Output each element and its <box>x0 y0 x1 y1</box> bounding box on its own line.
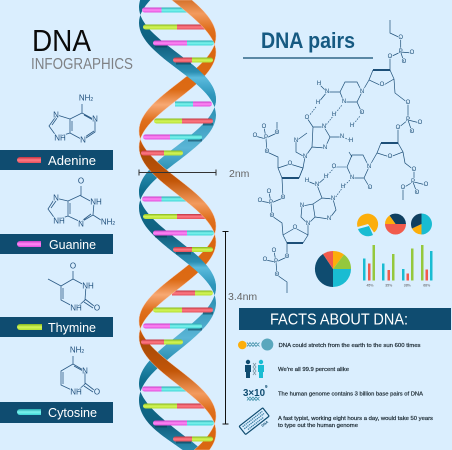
chart: DNA double helix <box>139 0 216 450</box>
diagram: base pair molecule: H <box>332 112 336 118</box>
diagram: base pair molecule: N <box>350 175 354 181</box>
icon: thymine structure: O <box>94 304 100 312</box>
fact 2: We're all 99.9 percent alike <box>278 367 349 373</box>
icon: sun to earth <box>238 338 273 350</box>
label: guanine <box>0 234 113 254</box>
subheading: infographics: INFOGRAPHICS <box>31 56 133 73</box>
diagram: base pair molecule: N <box>294 138 298 144</box>
dimension: 2nm width: 2nm <box>229 168 250 180</box>
fact 1: DNA could stretch from the earth to the sun 600 times <box>278 343 421 349</box>
diagram: base pair molecule: O <box>406 100 411 106</box>
icon: 3x10^9: 9 <box>265 384 268 389</box>
diagram: base pair molecule: O <box>267 189 272 195</box>
diagram: base pair molecule: P <box>411 179 415 185</box>
banner <box>239 308 451 330</box>
diagram: base pair molecule: O <box>410 129 415 135</box>
diagram: base pair molecule: O <box>285 254 290 260</box>
diagram: base pair molecule: O <box>263 257 268 263</box>
chart: bar groups: 45% <box>366 284 374 288</box>
diagram: base pair molecule: O <box>262 124 267 130</box>
base pairs in front <box>141 40 214 442</box>
diagram: base pair molecule: O <box>401 185 406 191</box>
diagram: base pair molecule: O <box>410 50 415 56</box>
diagram: base pair molecule: O <box>418 120 423 126</box>
chart: bar groups: 35% <box>385 284 393 288</box>
ribbon: blue strand over crossings <box>163 58 216 295</box>
chart: small pie 2 <box>385 214 406 234</box>
diagram: base pair molecule: N <box>322 124 326 130</box>
diagram: base pair molecule: N <box>367 164 371 170</box>
label: thymine <box>0 317 113 337</box>
diagram: base pair molecule: P <box>269 200 273 206</box>
ribbon: orange strand <box>139 0 216 450</box>
ribbon: blue strand <box>139 0 216 450</box>
diagram: base pair molecule: N <box>327 216 331 222</box>
dimension: 3.4nm pitch <box>222 232 257 424</box>
icon: guanine structure: N <box>78 220 84 228</box>
title <box>31 23 133 73</box>
diagram: base pair molecule: N <box>303 154 307 160</box>
label: adenine: Adenine <box>48 153 96 168</box>
icon: two people <box>245 360 264 378</box>
icon: cytosine structure: O <box>94 388 100 396</box>
icon: adenine structure: 2 <box>90 97 93 103</box>
chart: bar groups: 68% <box>423 284 431 288</box>
icon: 3x10^9 <box>243 384 268 400</box>
label: cytosine: Cytosine <box>48 405 97 420</box>
diagram: base pair molecule: P <box>406 117 410 123</box>
diagram: base pair molecule: O <box>360 110 365 116</box>
diagram: base pair molecule: N <box>360 89 364 95</box>
icon: keyboard <box>239 408 273 439</box>
banner: FACTS ABOUT DNA: <box>270 312 408 328</box>
diagram: base pair molecule: H <box>305 178 309 184</box>
icon: thymine structure: NH <box>70 304 82 312</box>
diagram: base pair molecule: O <box>253 133 258 139</box>
panel: nucleobases <box>0 94 115 423</box>
diagram: base pair molecule: N <box>340 134 344 140</box>
icon: guanine structure <box>48 176 115 228</box>
diagram: base pair molecule: O <box>265 149 270 155</box>
diagram: base pair molecule: H <box>341 184 345 190</box>
diagram: base pair molecule: O <box>258 198 263 204</box>
fact 4 <box>278 416 433 429</box>
label: thymine: Thymine <box>48 320 96 335</box>
diagram: base pair molecule: O <box>281 195 286 201</box>
diagram: base pair molecule: P <box>264 135 268 141</box>
diagram: base pair molecule: H <box>317 81 321 87</box>
icon: cytosine structure: NH <box>70 346 81 354</box>
diagram: base pair molecule: O <box>402 59 407 65</box>
diagram: base pair molecule: H <box>324 174 328 180</box>
diagram: base pair molecule: N <box>315 182 319 188</box>
icon: cytosine structure: 2 <box>81 349 84 355</box>
icon: thymine structure: NH <box>82 282 94 290</box>
diagram: base pair molecule: O <box>305 115 310 121</box>
diagram: base pair molecule: N <box>342 99 346 105</box>
icon: cytosine structure: N <box>82 366 88 376</box>
diagram: base pair molecule: H <box>350 123 354 129</box>
diagram: base pair molecule: O <box>396 125 401 131</box>
fact 4: A fast typist, working eight hours a day, would take 50 years <box>278 416 433 422</box>
diagram: base pair molecule: O <box>380 82 385 88</box>
chart: large pie <box>315 251 351 287</box>
chart: bar groups: 38% <box>404 284 412 288</box>
dimension: 2nm width <box>139 168 250 180</box>
icon: adenine structure: N <box>80 136 86 144</box>
diagram: base pair molecule: O <box>332 164 337 170</box>
diagram: base pair molecule: O <box>415 190 420 196</box>
icon: guanine structure: 2 <box>112 221 115 227</box>
diagram: base pair molecule: O <box>270 213 275 219</box>
diagram: base pair molecule: H <box>316 100 320 106</box>
diagram: base pair molecule: O <box>412 167 417 173</box>
chart: bar groups <box>363 245 432 288</box>
dimension: 3.4nm pitch: 3.4nm <box>228 291 257 303</box>
icon: thymine structure <box>48 262 100 312</box>
bar shadows <box>155 45 213 444</box>
label: guanine: Guanine <box>49 237 96 252</box>
label: cytosine <box>0 402 113 423</box>
diagram: base pair molecule: O <box>293 225 298 231</box>
icon: adenine structure <box>49 94 98 144</box>
icon: keyboard: DNA <box>261 420 269 428</box>
diagram: base pair molecule: N <box>325 89 329 95</box>
diagram: base pair molecule: O <box>288 161 293 167</box>
diagram: base pair molecule: O <box>275 130 280 136</box>
diagram: base pair molecule: O <box>388 154 393 160</box>
icon: thymine structure: O <box>70 262 76 270</box>
diagram: base pair molecule: N <box>323 145 327 151</box>
chart: small pie 3 <box>411 213 432 235</box>
chart: small pie 1 <box>357 214 378 236</box>
fact 4: to type out the human genome <box>278 423 358 429</box>
icon: guanine structure: NH <box>101 218 112 226</box>
diagram: base pair molecule: N <box>300 203 304 209</box>
heading: DNA pairs: DNA pairs <box>261 28 355 53</box>
panel: facts about DNA <box>238 308 451 439</box>
diagram: base pair molecule: O <box>398 35 403 41</box>
icon: guanine structure: O <box>78 176 84 186</box>
diagram: base pair molecule: N <box>331 196 335 202</box>
diagram: base pair molecule: O <box>424 182 429 188</box>
fact 3: The human genome contains 3 billion base pairs of DNA <box>278 392 423 398</box>
icon: cytosine structure <box>61 346 100 396</box>
diagram: base pair molecule: P <box>399 49 403 55</box>
icon: guanine structure: NH <box>53 216 65 226</box>
heading: DNA: DNA <box>32 23 91 58</box>
base pairs behind orange strand <box>142 8 213 408</box>
icon: adenine structure: NH <box>54 134 66 142</box>
icon: 3x10^9: 3×10 <box>243 388 265 399</box>
diagram: base pair molecule: O <box>275 272 280 278</box>
diagram: base pair molecule: H <box>349 138 353 144</box>
icon: adenine structure: N <box>53 110 59 120</box>
diagram: base pair molecule: O <box>368 185 373 191</box>
diagram: base pair molecule: O <box>272 248 277 254</box>
heading: DNA pairs <box>243 28 373 58</box>
icon: adenine structure: N <box>92 114 98 124</box>
diagram: base pair molecule <box>253 20 429 293</box>
icon: cytosine structure: NH <box>70 388 82 396</box>
icon: guanine structure: N <box>53 194 59 202</box>
icon: guanine structure: NH <box>90 198 102 206</box>
icon: adenine structure: NH <box>79 94 90 102</box>
label: adenine <box>0 150 113 170</box>
diagram: base pair molecule: P <box>274 259 278 265</box>
diagram: base pair molecule: N <box>306 221 310 227</box>
diagram: base pair molecule: O <box>388 54 393 60</box>
